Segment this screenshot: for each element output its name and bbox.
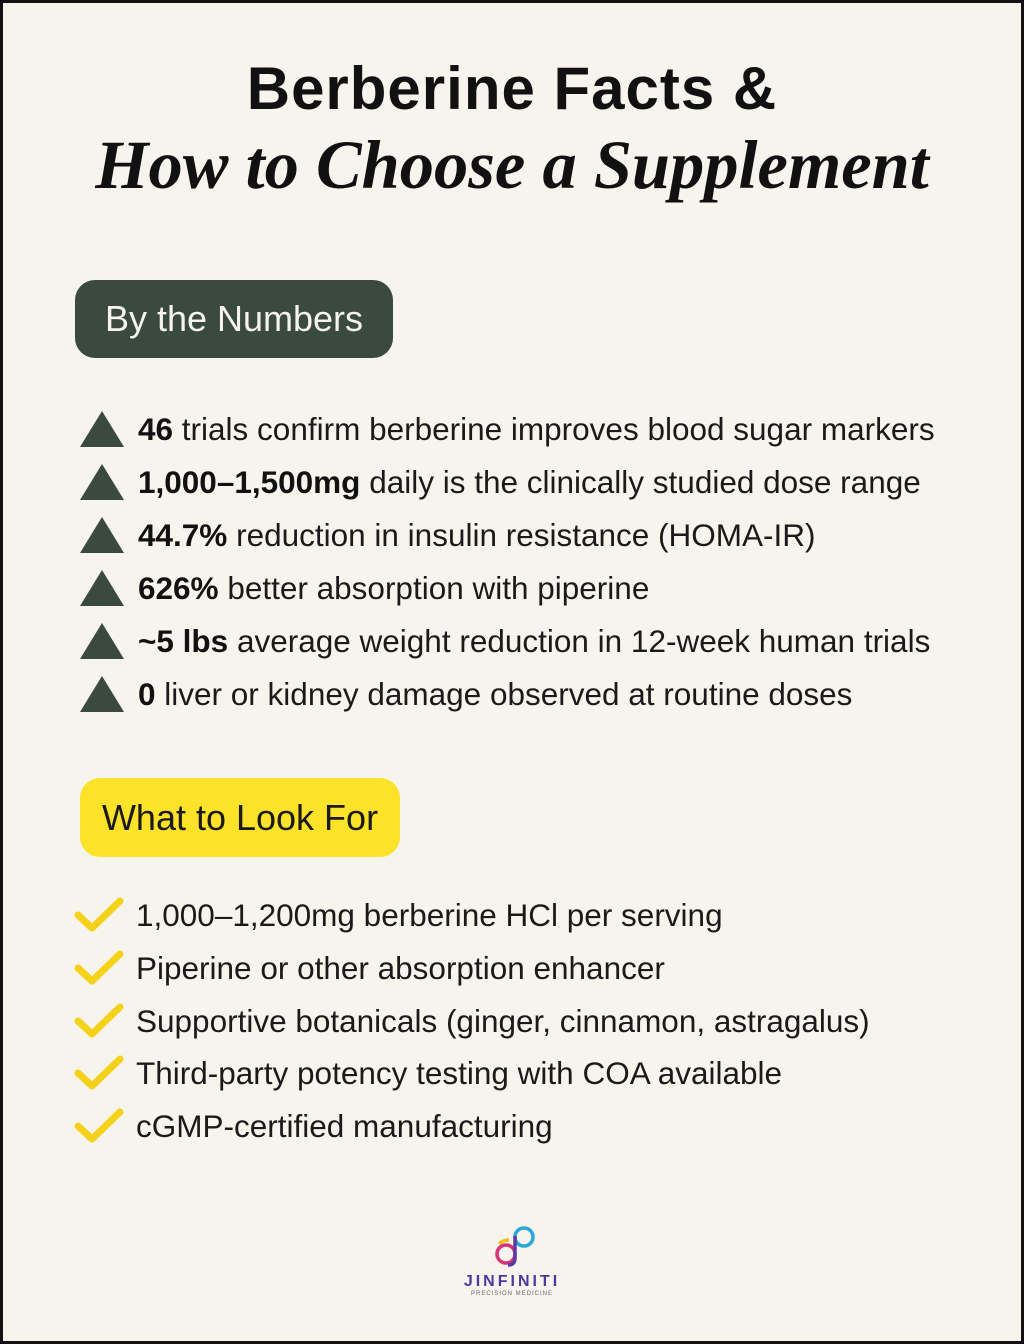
stat 6: 0 liver or kidney damage observed at routine doses [138, 676, 852, 712]
stat 5: ~5 lbs average weight reduction in 12-week human trials [138, 622, 930, 658]
stat 4: 626% better absorption with piperine [138, 570, 649, 606]
stat list [80, 410, 935, 712]
stat 2: 1,000–1,500mg daily is the clinically studied dose range [138, 464, 921, 500]
stat 1: 46 trials confirm berberine improves blood sugar markers [138, 410, 935, 446]
logo: Jinfiniti: PRECISION MEDICINE [471, 1291, 553, 1297]
title line 1: Berberine Facts & [247, 55, 777, 122]
title line 2: How to Choose a Supplement [95, 127, 929, 203]
heading pill: What to Look For: What to Look For [102, 796, 378, 838]
check item 5: cGMP-certified manufacturing [136, 1108, 553, 1144]
stat 3: 44.7% reduction in insulin resistance (HOMA-IR) [138, 516, 816, 552]
heading pill: By the Numbers: By the Numbers [105, 298, 363, 339]
heading pill: By the Numbers [75, 280, 393, 358]
logo icon [495, 1226, 535, 1267]
check item 4: Third-party potency testing with COA available [136, 1054, 782, 1090]
check item 3: Supportive botanicals (ginger, cinnamon, astragalus) [136, 1002, 870, 1038]
check item 2: Piperine or other absorption enhancer [136, 950, 665, 986]
check item 1: 1,000–1,200mg berberine HCl per serving [136, 896, 723, 932]
heading pill: What to Look For [80, 778, 400, 857]
logo text: JINFINITI [464, 1273, 560, 1290]
checklist [74, 896, 870, 1144]
logo: Jinfiniti [464, 1226, 560, 1297]
